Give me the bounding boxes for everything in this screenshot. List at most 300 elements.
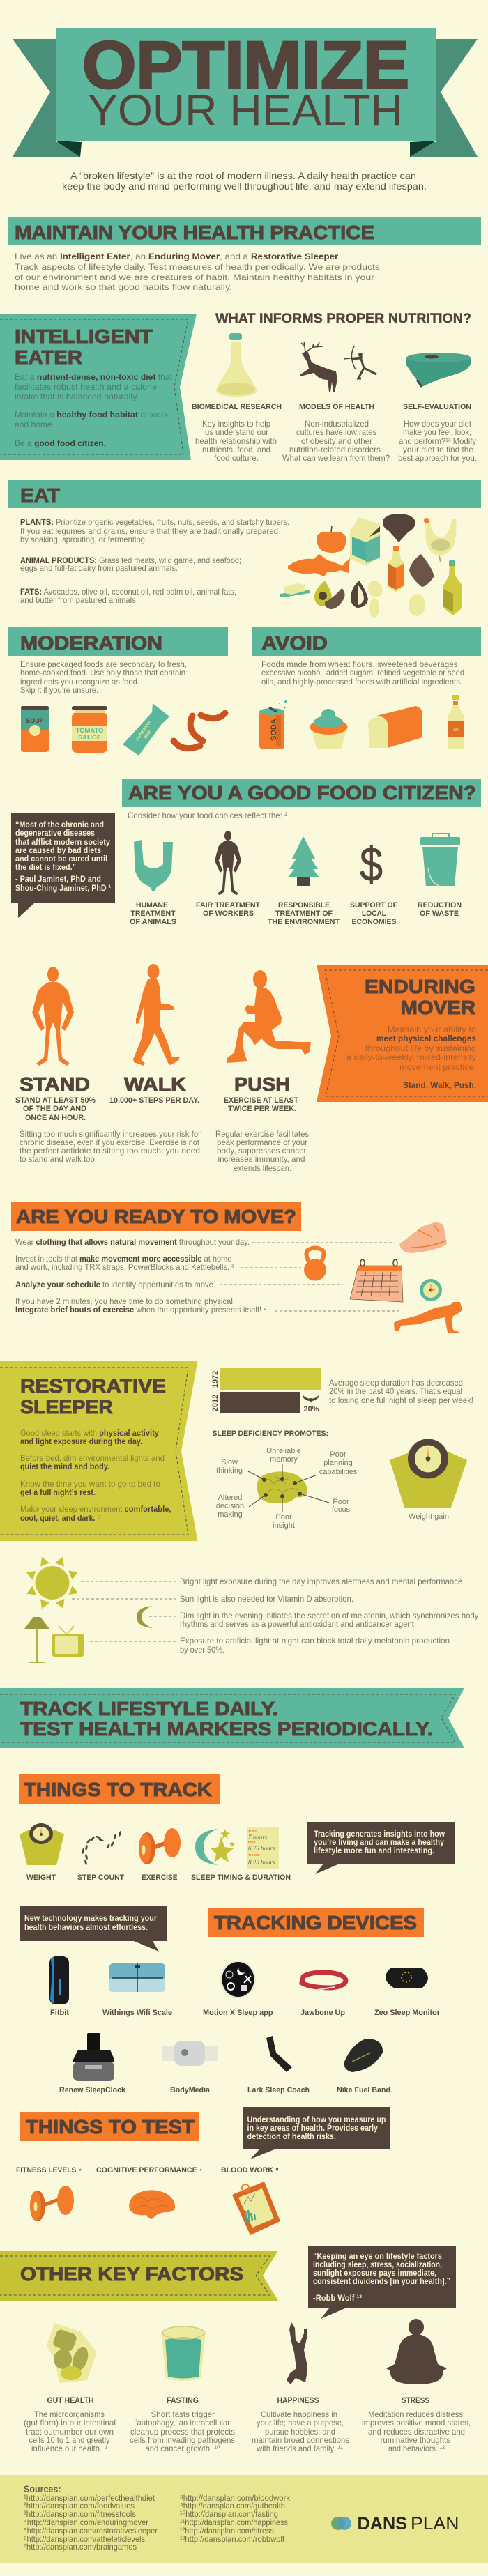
column: fasting: FASTING [167,2395,199,2405]
labels and text: biomedical research: BIOMEDICAL RESEARCH [192,403,282,411]
labels: food citizen values: ECONOMIES [351,918,396,926]
column: stress: ruminative thoughts [381,2435,450,2445]
labels and text: self-evaluation [398,403,477,463]
restorative sleeper text: Know the time you want to go to bed to [20,1479,160,1489]
heading: enduring mover: MOVER [400,997,475,1018]
icon: butter [280,583,310,597]
sources [24,2483,291,2552]
labels and text: models of health: MODELS OF HEALTH [299,403,374,411]
title ribbon: OPTIMIZE [82,28,409,102]
device: lark sleep coach [266,2036,292,2072]
callout: jaminet quote: degenerative diseases [15,828,95,838]
light facts: rhythms and serves as a powerful antioxidant and anticancer agent. [180,1619,416,1629]
labels and text: self-evaluation: and perform?¹³ Modify [399,436,476,446]
diagram: brain with sleep deficiency effects: Poor [330,1450,346,1459]
device: motion x app [220,1961,256,1998]
sources: Sources: [24,2483,61,2494]
eat text block: and butter from pastured animals. [20,595,138,605]
callout: tracking insights [307,1822,455,1874]
icon: dollar sign: $ [360,837,383,891]
enduring mover text: meet physical challenges [376,1034,476,1043]
labels: food citizen values: TREATMENT [131,910,176,918]
logo: dansplan: DANS [357,2514,407,2533]
heading: tracking devices [208,1908,424,1937]
icon: sleep log note: 7 hours [248,1834,268,1841]
diagram: brain with sleep deficiency effects: focus [332,1505,351,1514]
icon: orange oil bottle [388,546,404,592]
icon: weight scale: Weight gain [409,1512,449,1521]
callout: new technology: health behaviors almost effortless. [24,1922,148,1932]
column: gut health: The microorganisms [34,2409,105,2419]
callout: jaminet quote [11,813,115,918]
icon: sleep log note: THURS. [248,1853,260,1857]
text: regular exercise: Regular exercise facilitates [215,1129,309,1139]
tip: clothing: Wear clothing that allows natural movement throughout your day. [15,1237,250,1247]
logo: dansplan: PLAN [411,2514,459,2533]
avoid text: Foods made from wheat flours, sweetened beverages, [261,659,460,669]
eat text block: by soaking, sprouting, or fermenting. [20,535,147,544]
enduring mover text: Maintain your ability to [388,1025,476,1034]
icon: fish [288,554,350,576]
diagram: brain with sleep deficiency effects [216,1447,358,1530]
sources: ⁷http://dansplan.com/braingames [24,2542,137,2552]
panel: intelligent eater [0,314,197,460]
icon: apple [317,526,346,553]
icon: nutrition bar: BAR [144,730,153,739]
callout: new technology [20,1906,167,1952]
eat text block: ANIMAL PRODUCTS: Grass fed meats, wild game, and seafood; [20,555,241,565]
text: sleep duration [329,1378,473,1405]
labels: food citizen values: SUPPORT OF [350,901,397,910]
label: push: PUSH [234,1073,290,1095]
icon group: healthy foods [280,514,462,618]
icon: sun [24,1555,80,1611]
label: push: EXERCISE AT LEAST [224,1096,298,1105]
callout: jaminet quote: are caused by bad diets [15,845,101,855]
tip: brief bouts [15,1296,400,1314]
heading: sleep deficiency promotes: SLEEP DEFICIENCY PROMOTES: [212,1429,328,1438]
icon: sausages [174,713,225,749]
text: sleep duration: to losing one full night of sleep per week! [329,1395,473,1405]
device: zeo monitor [386,1968,428,1988]
enduring mover text: Stand, Walk, Push. [403,1080,476,1090]
enduring mover text: throughout life by sustaining [365,1043,476,1053]
text: sleep duration: 20% in the past 40 years. That’s equal [329,1386,462,1396]
callout: robb wolf quote: consistent dividends [in your health].” [313,2276,450,2286]
figure: happiness [287,2322,307,2384]
light facts: Sun light is also needed for Vitamin D absorption. [180,1594,353,1604]
column: stress: and reduces distractive and [368,2427,465,2437]
column: stress: and behaviors. ¹² [388,2444,445,2453]
tip: brief bouts: Integrate brief bouts of exercise when the opportunity presents itself! ⁴ [15,1305,267,1314]
icon: sleep log note: 6.75 hours [248,1845,275,1852]
restorative sleeper text: and light exposure during the day. [20,1436,142,1446]
heading: things to test: THINGS TO TEST [26,2116,195,2138]
footer band [0,2475,488,2563]
icon: vegetable oil bottle: Oil [453,728,459,733]
icon: dumbbell [139,1828,181,1864]
text: sitting: chronic disease, even if you exercise. Exercise is not [20,1137,200,1147]
labels: food citizen values: LOCAL [362,910,386,918]
labels: tracking devices row two: BodyMedia [170,2086,211,2094]
callout: jaminet quote: “Most of the chronic and [15,820,104,829]
icon: nutrition bar: NUTRITION [135,721,152,742]
restorative sleeper text: get a full night’s rest. [20,1487,96,1497]
eat text block: PLANTS: Prioritize organic vegetables, fruits, nuts, seeds, and startchy tubers. [20,517,289,527]
icon: tomato sauce jar [72,706,107,753]
icon: brown nut [409,554,434,587]
heading: maintain your health practice: MAINTAIN YOUR HEALTH PRACTICE [15,222,374,243]
label: stand: OF THE DAY AND [23,1105,86,1113]
heading: eat: EAT [20,484,60,506]
heading: enduring mover: ENDURING [365,976,475,997]
sources: ¹http://dansplan.com/perfecthealthdiet [24,2493,155,2503]
icon: kettlebell [304,1248,326,1281]
banner: track lifestyle daily: TRACK LIFESTYLE DAILY. [20,1698,278,1719]
labels: food citizen values: REDUCTION [418,901,462,910]
diagram: brain with sleep deficiency effects: insight [273,1521,295,1530]
device: withings scale [109,1963,165,1992]
avoid text [261,659,464,687]
labels and text: models of health: Non-industrialized [305,419,369,429]
column: gut health [24,2395,116,2453]
labels and text: self-evaluation: your diet to find the [403,445,473,454]
callout: robb wolf quote: “Keeping an eye on lifestyle factors [313,2251,442,2261]
icon: television [52,1626,84,1657]
text: regular exercise: increases immunity, and [218,1154,305,1164]
avoid text: excessive alcohol, added sugars, refined vegetable or seed [261,668,464,677]
diagram: brain with sleep deficiency effects: Slow [221,1458,238,1466]
icon: moon and stars [195,1829,235,1865]
heading: moderation: MODERATION [20,632,162,654]
column: happiness: with friends and family. ¹¹ [256,2444,343,2453]
callout: tracking insights: you’re living and can make a healthy [314,1837,444,1847]
icon: gut microorganisms [47,2323,97,2383]
maintain text block: Live as an Intelligent Eater , an Enduring Mover , and a Restorative Sleeper . [15,252,341,261]
callout: jaminet quote: and cannot be cured until [15,854,107,864]
callout: robb wolf quote: sunlight exposure pays immediate, [313,2268,436,2278]
heading: restorative sleeper [20,1375,166,1418]
restorative sleeper text: cool, quiet, and dark. ⁵ [20,1513,100,1523]
callout: understanding health [243,2107,390,2159]
labels and text: self-evaluation: make you feel, look, [403,427,471,437]
labels: things to track [26,1873,291,1882]
icon: olive oil bottle [443,560,462,615]
maintain text block [15,252,380,292]
heading: restorative sleeper: SLEEPER [20,1396,113,1418]
eat text block: If you eat legumes and grains, ensure that they are traditionally prepared [20,526,278,536]
maintain text block: home and work so that good habits flow naturally. [15,282,232,292]
icon: sleep log note: WED. [248,1841,257,1844]
chart: sleep duration bars: 1972 [211,1371,220,1388]
labels: things to test: COGNITIVE PERFORMANCE ⁷ [96,2166,202,2175]
column: happiness: pursue hobbies, and [265,2427,335,2437]
heading: are you ready to move [11,1202,301,1231]
column: gut health: (gut flora) in our intestinal [24,2418,116,2428]
icon: soda can [259,700,287,749]
labels: tracking devices row two [59,2086,390,2094]
diagram: brain with sleep deficiency effects: memory [270,1455,298,1464]
icon: avocado [314,581,344,609]
sources: ³http://dansplan.com/fitnesstools [24,2509,136,2519]
maintain text block: Track aspects of lifestyle daily. Test measures of health periodically. We are products [15,262,380,272]
icon: bread [368,706,422,748]
chart: sleep duration bars: 20% [304,1405,319,1413]
labels: tracking devices row one: Motion X Sleep app [203,2009,273,2017]
column: fasting: Short fasts trigger [151,2409,215,2419]
callout: understanding health: in key areas of health. Provides early [247,2123,378,2133]
enduring mover text: a daily-to-weekly, mixed-intensity [346,1052,476,1062]
icon: soup can: SOUP [26,717,44,724]
heading: avoid: AVOID [261,632,328,654]
moderation text [20,659,187,695]
text: sitting [20,1129,201,1164]
callout: tracking insights: lifestyle more fun and interesting. [314,1846,434,1855]
icon: milk carton [350,517,380,566]
heading: are you ready to move: ARE YOU READY TO MOVE? [16,1206,296,1227]
tip: tools: and work, including TRX straps, PowerBlocks and Kettlebells. ³ [15,1262,234,1272]
eat text block [20,517,289,605]
column: fasting: and cancer growth. ¹⁰ [145,2444,220,2453]
icon: scale [20,1823,64,1865]
column: stress: Meditation reduces distress, [368,2409,465,2419]
heading: intelligent eater: EATER [15,346,82,368]
labels and text: biomedical research: nutrients, food, and [202,445,270,454]
icon: tomato sauce jar: TOMATO [75,727,104,735]
labels: things to test [16,2166,279,2175]
icon: worker silhouette [215,831,241,895]
callout: jaminet quote: - Paul Jaminet, PhD and [15,874,101,884]
labels: tracking devices row one: Jawbone Up [300,2009,345,2017]
diagram: brain with sleep deficiency effects: Altered [218,1494,242,1502]
labels and text: models of health: of obesity and other [301,436,372,446]
moderation text: home-cooked food. Use only those that contain [20,668,185,677]
figure: meditation [386,2319,447,2384]
labels: food citizen values: RESPONSIBLE [278,901,330,910]
icon: moon [137,1606,153,1628]
icon: sleep log note: TUES. [248,1830,257,1833]
restorative sleeper text: Before bed, dim environmental lights and [20,1453,165,1463]
tip: brief bouts: If you have 2 minutes, you have time to do something physical. [15,1296,235,1306]
icon: clock [420,1279,442,1301]
avoid text: oils, and highly-processed foods with artificial ingredients. [261,677,462,687]
intelligent eater text: facilitates robust health and a calorie [15,382,157,392]
icon: clipboard [232,2182,280,2235]
icon: seeds [351,578,425,618]
icon: soda can: SODA [270,719,278,741]
light facts: Exposure to artificial light at night can block total daily melatonin production [180,1636,450,1646]
heading: things to test [20,2112,199,2141]
label: walk: 10,000+ STEPS PER DAY. [109,1096,199,1105]
diagram: brain with sleep deficiency effects: Unreliable [266,1447,301,1455]
light facts: Dim light in the evening initiates the secretion of melatonin, which synchronizes body [180,1611,478,1620]
labels and text: biomedical research: us understand our [205,427,268,437]
icon: nutrition bar [123,703,169,756]
icon: soup can [21,706,49,752]
figure: walk [133,964,180,1066]
labels and text: biomedical research [192,403,282,463]
device: nike fuel band [344,2039,383,2072]
labels: things to track: STEP COUNT [77,1873,124,1882]
intelligent eater text: Be a good food citizen. [15,438,106,448]
tip: tools: Invest in tools that make movement more accessible at home [15,1254,232,1264]
labels: tracking devices row two: Renew SleepClock [59,2086,126,2094]
labels and text: self-evaluation: How does your diet [404,419,472,429]
icon: sleep log note: 8.25 hours [248,1859,275,1866]
heading: things to track: THINGS TO TRACK [24,1779,212,1800]
heading: intelligent eater [15,325,153,368]
icon: cupcake [310,709,347,749]
text: sitting: the perfect antidote to sitting too much; you need [20,1146,200,1156]
labels: things to test: BLOOD WORK ⁸ [221,2166,279,2175]
heading: what informs proper nutrition: WHAT INFORMS PROPER NUTRITION? [215,312,471,326]
eat text block: eggs and full-fat dairy from pastured animals. [20,563,178,573]
icon: calendar [350,1259,403,1302]
eat text block: FATS: Avocados, olive oil, coconut oil, red palm oil, animal fats, [20,587,236,597]
labels: food citizen values: OF WASTE [420,910,459,918]
icon: tree [288,836,319,886]
label: stand [15,1073,96,1122]
callout: robb wolf quote [308,2246,456,2319]
label: stand: STAND [20,1073,90,1095]
sources: ¹⁰http://dansplan.com/fasting [180,2509,278,2519]
callout: robb wolf quote: including sleep, stress, socialization, [313,2260,442,2269]
restorative sleeper text: Make your sleep environment comfortable, [20,1504,171,1514]
column: happiness: your life; have a purpose, [257,2418,344,2428]
text: sitting: to stand and walk too. [20,1154,97,1164]
column: happiness: HAPPINESS [277,2395,319,2405]
sources: ⁴http://dansplan.com/enduringmover [24,2517,148,2527]
panel: restorative sleeper [0,1361,198,1541]
labels and text: models of health: nutrition-related disorders. [289,445,383,454]
device: fitbit [49,1956,69,2004]
sources: ⁸http://dansplan.com/bloodwork [180,2493,291,2503]
labels: things to track: SLEEP TIMING & DURATION [191,1873,291,1882]
moderation text: Skip it if you’re unsure. [20,685,98,695]
banner: other key factors: OTHER KEY FACTORS [20,2263,243,2285]
banner: track lifestyle daily [0,1688,464,1748]
heading: are you a good food citizen: ARE YOU A GOOD FOOD CITIZEN? [128,782,476,804]
title ribbon: YOUR HEALTH [88,86,403,135]
icon: trash bin [420,834,460,886]
heading: things to track [19,1774,220,1804]
icon: flask [216,333,257,397]
label: push: TWICE PER WEEK. [228,1105,296,1113]
device: bodymedia [162,2041,218,2066]
column: fasting: cells from invading pathogens [130,2435,235,2445]
column: fasting: cleanup process that protects [130,2427,235,2437]
icon: horseshoe [134,840,173,891]
heading: moderation [8,627,228,656]
logo: dansplan [331,2514,459,2533]
column: gut health: GUT HEALTH [47,2395,93,2405]
column: fasting: ‘autophagy,’ an intracellular [135,2418,230,2428]
labels and text: biomedical research: Key insights to help [202,419,270,429]
moderation text: ingredients you recognize as food. [20,677,139,687]
chart: sleep duration bars: 2012 [211,1395,220,1411]
column: stress [362,2395,471,2453]
restorative sleeper text: quiet the mind and body. [20,1462,109,1471]
column: fasting [130,2395,235,2453]
labels: tracking devices row one: Fitbit [50,2009,69,2017]
sources: ⁵http://dansplan.com/restorativesleeper [24,2526,158,2536]
figure: stand [32,967,74,1066]
sources: ⁹http://dansplan.com/guthealth [180,2501,285,2510]
chart: sleep duration bars [211,1368,321,1413]
diagram: brain with sleep deficiency effects: making [218,1510,243,1519]
heading: eat [8,480,481,508]
icon: sleep log note [247,1827,279,1869]
callout: tracking insights: Tracking generates insights into how [314,1829,445,1839]
icon: tomato sauce jar: SAUCE [78,734,101,742]
label: walk [109,1073,199,1105]
intelligent eater text [15,372,173,448]
icon: orange brain [129,2190,175,2219]
sources: ²http://dansplan.com/foodvalues [24,2501,135,2510]
icon: shoe [399,1222,447,1253]
restorative sleeper text: Good sleep starts with physical activity [20,1428,159,1438]
column: stress: improves positive mood states, [362,2418,471,2428]
column: stress: STRESS [402,2395,429,2405]
labels: things to track: EXERCISE [142,1873,177,1882]
callout: new technology: New technology makes tracking your [24,1913,157,1923]
column: happiness [252,2395,349,2453]
diagram: brain with sleep deficiency effects: planning [323,1459,353,1467]
intelligent eater text: and home. [15,420,54,429]
maintain text block: of our environment and we are creatures of habit. Maintain healthy habitats in your [15,273,374,282]
intelligent eater text: Maintain a healthy food habitat at work [15,410,169,420]
panel: enduring mover [317,965,488,1102]
heading: avoid [252,627,481,656]
text: regular exercise: body, suppresses cancer, [217,1146,308,1156]
intelligent eater text: intake that is balanced naturally. [15,392,139,401]
labels: food citizen values: OF ANIMALS [130,918,176,926]
labels: food citizen values: HUMANE [136,901,168,910]
icon: chicken [424,518,456,562]
diagram: brain with sleep deficiency effects: decision [216,1502,244,1510]
icon: dumbbell test [30,2186,74,2221]
sources: ⁶http://dansplan.com/atheleticlevels [24,2534,145,2544]
diagram: brain with sleep deficiency effects: Poor [275,1513,292,1521]
light facts [72,1577,478,1655]
callout: understanding health: Understanding of how you measure up [247,2115,386,2124]
labels: things to test: FITNESS LEVELS ⁶ [16,2166,82,2175]
labels and text: self-evaluation: SELF-EVALUATION [403,403,471,411]
intro text [62,170,427,192]
icon: glass of water [161,2326,206,2381]
labels and text: models of health [282,403,390,463]
heading: restorative sleeper: RESTORATIVE [20,1375,166,1397]
callout: robb wolf quote: -Robb Wolf ¹³ [313,2293,362,2303]
device: jawbone up [302,1972,346,1990]
text: regular exercise: peak performance of your [217,1137,307,1147]
column: gut health: tract outnumber our own [26,2427,114,2437]
figure: push-up [394,1302,462,1333]
labels: tracking devices row one: Zeo Sleep Monitor [374,2009,441,2017]
banner: other key factors [0,2251,278,2301]
heading: are you a good food citizen [122,779,481,807]
callout: jaminet quote: Shou-Ching Jaminet, PhD ¹ [15,883,111,893]
icon: footprints [82,1831,121,1865]
tip: tools [15,1254,301,1272]
labels: tracking devices row two: Lark Sleep Coach [247,2086,310,2094]
label: push [224,1073,298,1113]
diagram: brain with sleep deficiency effects: Poor [333,1498,349,1506]
sources: ¹³http://dansplan.com/robbwolf [180,2534,285,2544]
labels and text: biomedical research: health relationship with [195,436,277,446]
column: happiness: maintain broad connections [252,2435,349,2445]
icon: leafy green [383,514,415,542]
